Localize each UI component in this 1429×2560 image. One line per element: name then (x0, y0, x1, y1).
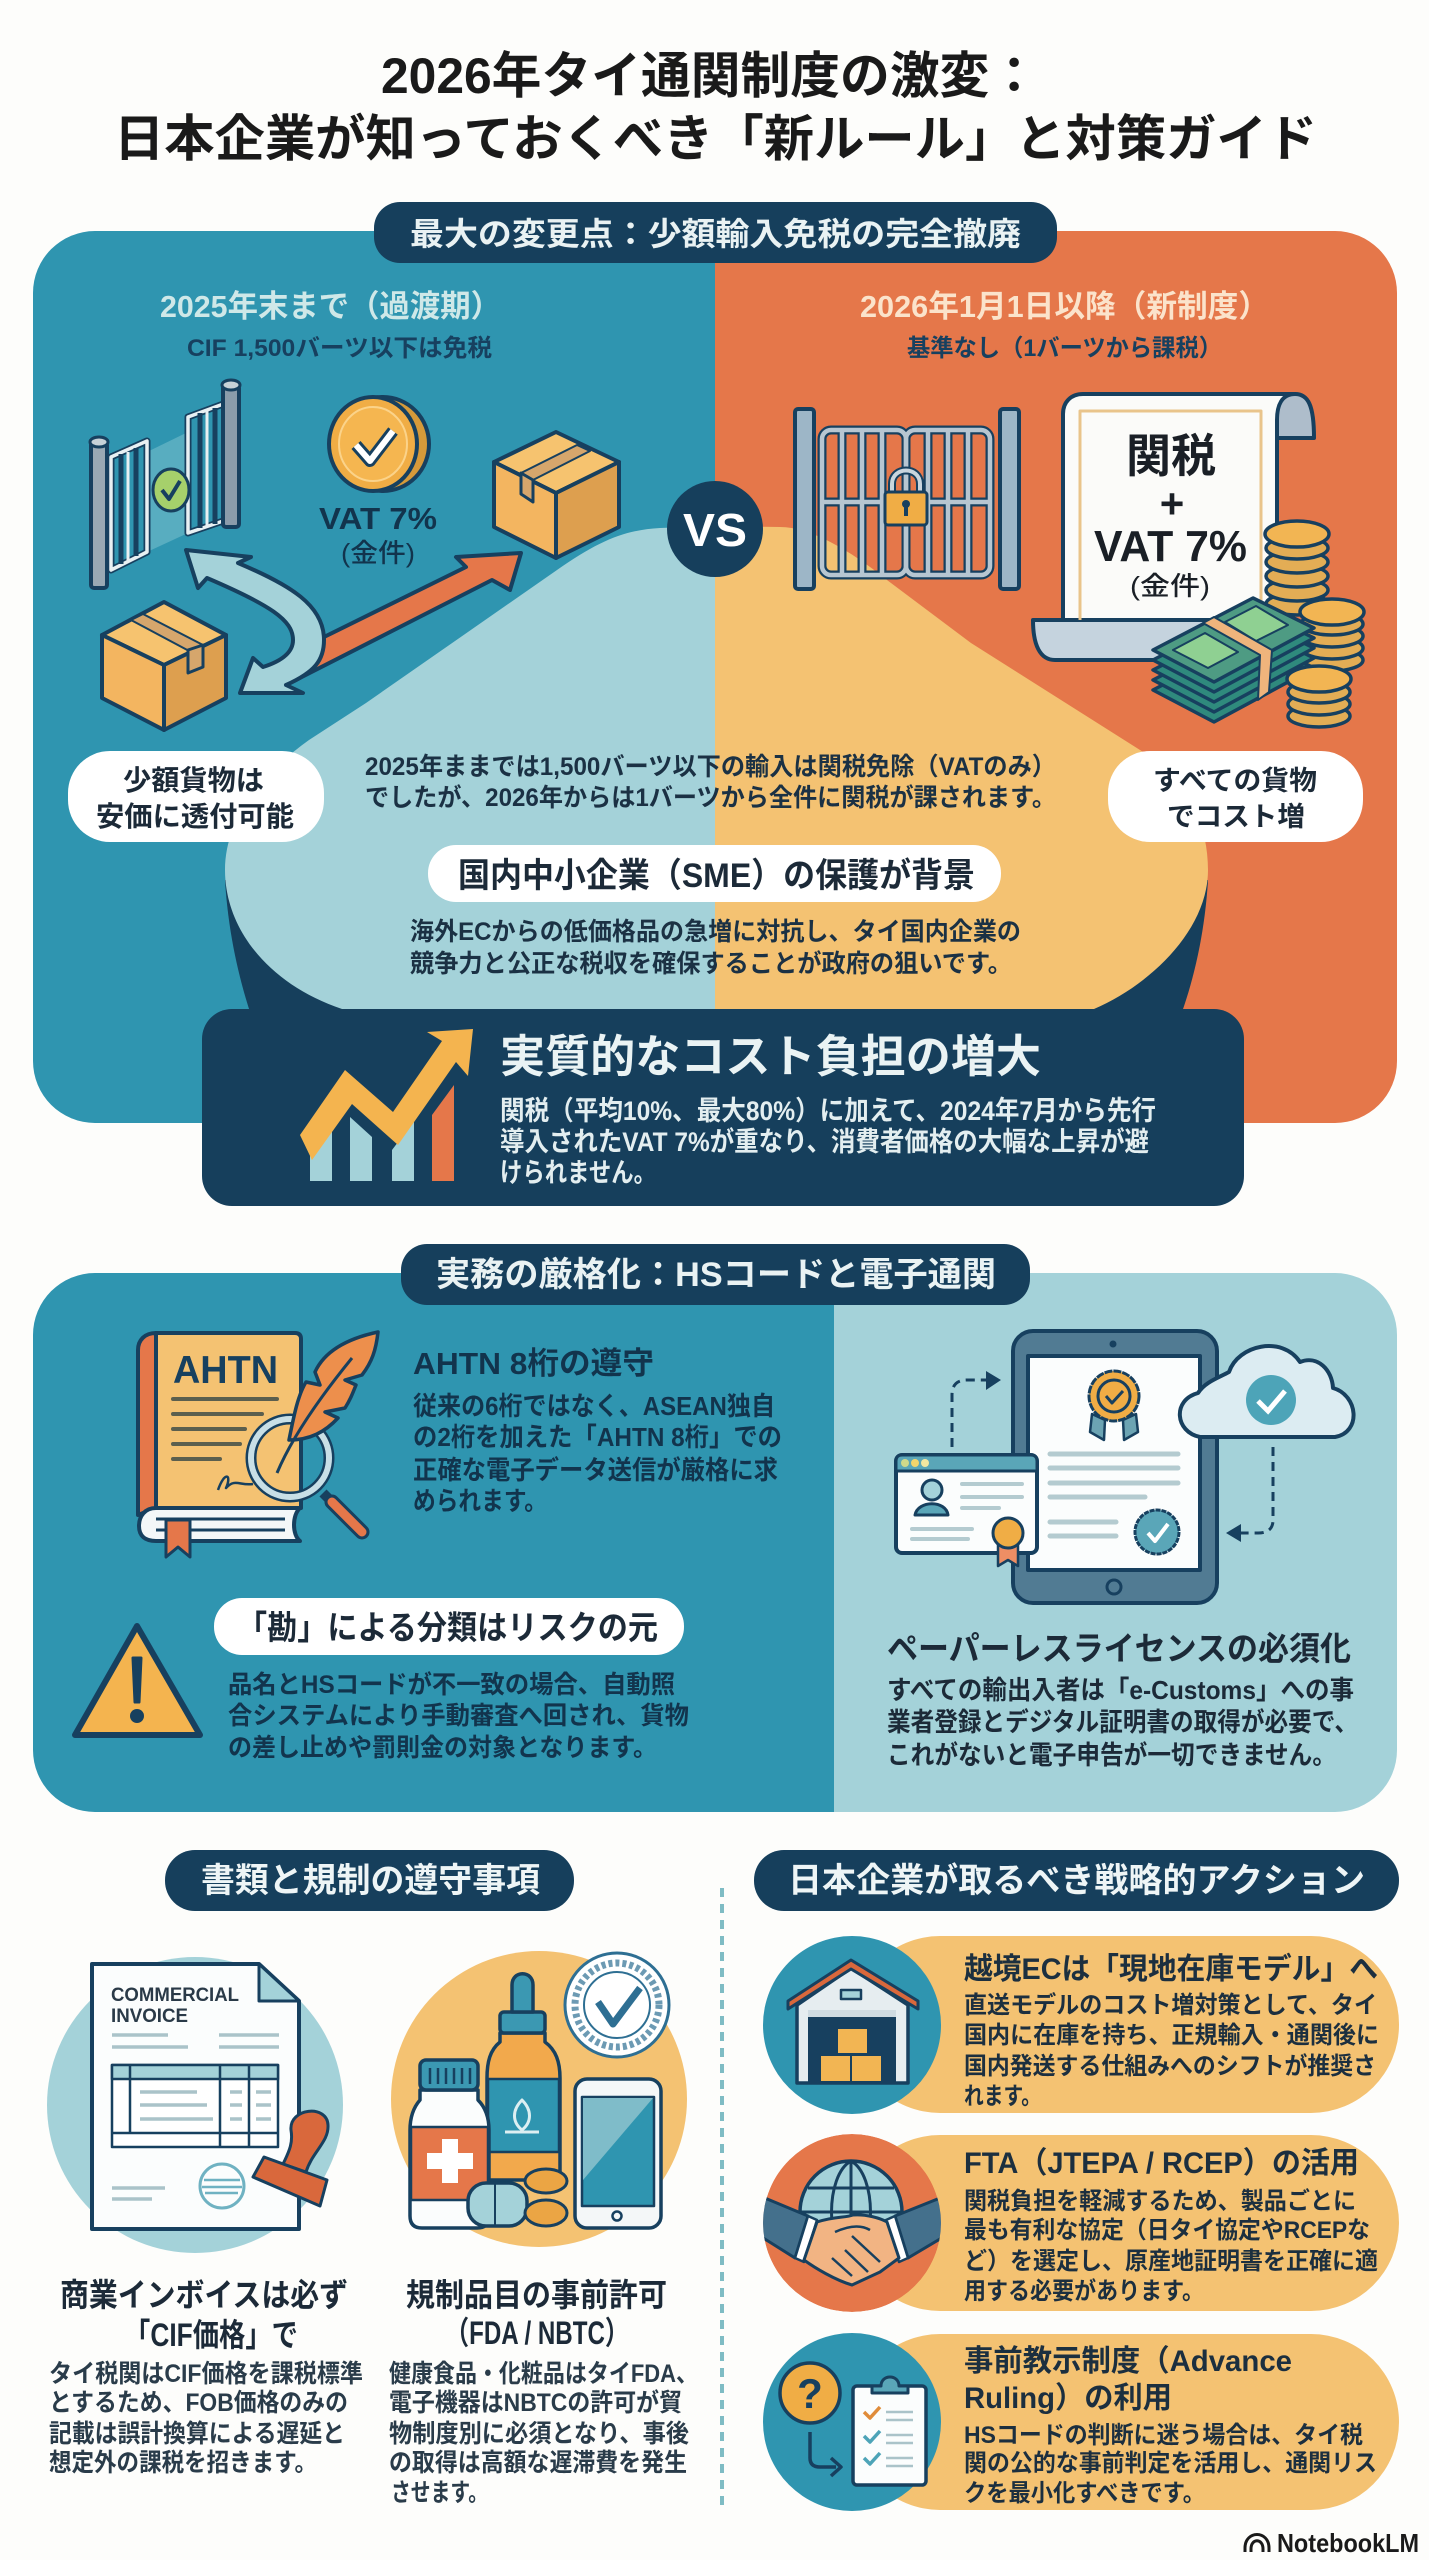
card: local inventory model: 国内発送する仕組みへのシフトが推奨さ (964, 2052, 1376, 2080)
callout: small parcels left bubble: 少額貨物は (123, 765, 264, 796)
icon: locked gate (795, 409, 1019, 589)
callout: all parcels right bubble: でコスト増 (1167, 802, 1305, 832)
icon: box left (102, 602, 226, 730)
card: local inventory model: 国内に在庫を持ち、正規輸入・通関後に (964, 2022, 1379, 2049)
card: advance ruling (763, 2333, 1399, 2511)
text block: SME explanation (410, 918, 1021, 978)
icon: warning triangle (75, 1626, 200, 1735)
callout: SME protection pill: 国内中小企業（SME）の保護が背景 (458, 856, 975, 895)
title (114, 48, 1317, 167)
left column heading (160, 289, 501, 362)
icon: warehouse (763, 1936, 941, 2114)
text: paperless license (887, 1630, 1358, 1770)
card: FTA usage (760, 2134, 1399, 2312)
section pill: documents (165, 1850, 574, 1911)
text: risk body: 品名とHSコードが不一致の場合、自動照 (228, 1670, 675, 1699)
icon: open gate (90, 380, 240, 588)
panel: cost burden: 実質的なコスト負担の増大 (500, 1031, 1041, 1082)
text: paperless license: 業者登録とデジタル証明書の取得が必要で、 (887, 1707, 1358, 1737)
VAT label left (319, 501, 437, 568)
card: local inventory model: 直送モデルのコスト増対策として、タイ (964, 1991, 1377, 2019)
card: local inventory model: 越境ECは「現地在庫モデル」へ (964, 1952, 1378, 1986)
icon: commercial invoice: INVOICE (111, 2006, 188, 2027)
arrow: orange export arrow (286, 553, 521, 685)
text: AHTN heading and body: 正確な電子データ送信が厳格に求 (413, 1455, 778, 1485)
text: risk body: 合システムにより手動審査へ回され、貨物 (228, 1702, 689, 1730)
text: AHTN heading and body: められます。 (413, 1486, 547, 1516)
card: FTA usage: 用する必要があります。 (964, 2277, 1204, 2305)
icon: commercial invoice: COMMERCIAL (111, 1985, 239, 2006)
card: FTA usage: 関税負担を軽減するため、製品ごとに (964, 2187, 1356, 2215)
text: risk body (228, 1670, 689, 1762)
card: advance ruling: クを最小化すべきです。 (964, 2480, 1205, 2507)
text: AHTN heading and body: の2桁を加えた「AHTN 8桁」での (413, 1422, 782, 1452)
icon: AHTN book (138, 1332, 378, 1557)
title: 2026年タイ通関制度の激変： (381, 48, 1039, 104)
icon: tablet with certificate (1013, 1331, 1217, 1603)
right column heading: 基準なし（1バーツから課税） (907, 335, 1222, 362)
callout: SME protection pill (428, 845, 1001, 902)
card: advance ruling: Ruling）の利用 (964, 2382, 1172, 2415)
text: prior permit rule: の取得は高額な遅滞費を発生 (389, 2449, 687, 2477)
left column heading: CIF 1,500バーツ以下は免税 (187, 335, 492, 362)
text: AHTN heading and body: 従来の6桁ではなく、ASEAN独自 (413, 1391, 775, 1421)
text block: rule change summary (365, 753, 1056, 812)
text: prior permit rule: （FDA / NBTC） (445, 2315, 629, 2351)
text: AHTN heading and body: AHTN 8桁の遵守 (413, 1346, 654, 1381)
card: FTA usage: 最も有利な協定（日タイ協定やRCEPな (964, 2217, 1370, 2244)
icon: handshake and globe (760, 2134, 945, 2312)
icon: tax scroll document: + (1160, 480, 1184, 527)
text: commercial invoice rule: 「CIF価格」で (124, 2317, 298, 2353)
icon: question and checklist: ? (797, 2370, 823, 2417)
bar chart icon (300, 1029, 473, 1181)
section pill: HS code: 実務の厳格化：HSコードと電子通関 (436, 1256, 996, 1294)
icon: box right (494, 432, 619, 558)
text: commercial invoice rule: タイ税関はCIF価格を課税標準 (49, 2360, 363, 2388)
icon: commercial invoice (47, 1957, 343, 2253)
section pill: HS code (401, 1244, 1030, 1305)
text: paperless license: すべての輸出入者は「e-Customs」への事 (887, 1675, 1354, 1705)
text: prior permit rule: 電子機器はNBTCの許可が貿 (389, 2388, 682, 2417)
panel: cost burden (202, 1009, 1244, 1206)
text: prior permit rule: 物制度別に必須となり、事後 (389, 2420, 689, 2448)
card: local inventory model: れます。 (964, 2083, 1041, 2110)
callout: guesswork risk pill: 「勘」による分類はリスクの元 (237, 1609, 658, 1646)
text: commercial invoice rule: 想定外の課税を招きます。 (49, 2449, 317, 2477)
icon: coins and banknotes (1153, 521, 1364, 727)
arrow: pale return arrow (186, 550, 324, 693)
card: advance ruling: 関の公的な事前判定を活用し、通関リス (964, 2450, 1377, 2477)
card: advance ruling: 事前教示制度（Advance (964, 2345, 1292, 2378)
section pill: strategic actions (754, 1850, 1399, 1911)
panel: cost burden: けられません。 (500, 1158, 656, 1188)
text block: rule change summary: 2025年ままでは1,500バーツ以下の輸入は関税免除（VATのみ） (365, 753, 1056, 781)
card: FTA usage: ど）を選定し、原産地証明書を正確に適 (964, 2248, 1378, 2275)
callout: small parcels left bubble (68, 751, 324, 842)
section pill: biggest change (374, 202, 1057, 263)
panel: HS code and e-customs (33, 1273, 1397, 1812)
text block: rule change summary: でしたが、2026年からは1バーツから全件に関税が課されます。 (365, 783, 1056, 812)
icon: profile window (896, 1455, 1037, 1566)
section pill: strategic actions: 日本企業が取るべき戦略的アクション (788, 1861, 1365, 1900)
icon: coin (329, 397, 429, 491)
panel: cost burden: 関税（平均10%、最大80%）に加えて、2024年7月から先行 (500, 1096, 1156, 1126)
text: commercial invoice rule: 商業インボイスは必ず (60, 2277, 348, 2313)
VAT label left: (金件) (341, 538, 415, 568)
icon: tax scroll document (1033, 394, 1314, 660)
text: AHTN heading and body (413, 1346, 782, 1516)
VAT label left: VAT 7% (319, 501, 437, 536)
text block: SME explanation: 海外ECからの低価格品の急増に対抗し、タイ国内企業の (410, 918, 1021, 946)
icon: question and checklist (763, 2333, 941, 2511)
text: paperless license: これがないと電子申告が一切できません。 (887, 1740, 1336, 1770)
text: risk body: の差し止めや罰則金の対象となります。 (228, 1734, 657, 1762)
icon: regulated products (391, 1951, 687, 2247)
callout: small parcels left bubble: 安価に透付可能 (96, 801, 294, 832)
card: advance ruling: HSコードの判断に迷う場合は、タイ税 (964, 2422, 1363, 2449)
callout: guesswork risk pill (214, 1598, 684, 1655)
section pill: documents: 書類と規制の遵守事項 (201, 1862, 540, 1900)
icon: VS badge: VS (683, 504, 747, 556)
title: 日本企業が知っておくべき「新ルール」と対策ガイド (114, 111, 1317, 167)
icon: AHTN book: AHTN (173, 1349, 278, 1392)
left column heading: 2025年末まで（過渡期） (160, 289, 501, 324)
icon: cloud with check (1180, 1346, 1354, 1437)
icon: tax scroll document: (金件) (1130, 571, 1210, 601)
icon: VS badge (667, 481, 763, 577)
text: prior permit rule: 健康食品・化粧品はタイFDA、 (389, 2360, 698, 2388)
callout: all parcels right bubble: すべての貨物 (1153, 766, 1317, 796)
panel: cost burden: 導入されたVAT 7%が重なり、消費者価格の大幅な上昇が避 (500, 1126, 1149, 1157)
text: commercial invoice rule (49, 2277, 363, 2477)
text: prior permit rule (389, 2277, 698, 2507)
text: paperless license: ペーパーレスライセンスの必須化 (887, 1630, 1351, 1667)
card: FTA usage: FTA（JTEPA / RCEP）の活用 (964, 2147, 1359, 2180)
text block: SME explanation: 競争力と公正な税収を確保することが政府の狙いです。 (410, 949, 1012, 978)
text: commercial invoice rule: とするため、FOB価格のみの (49, 2389, 348, 2417)
right column heading: 2026年1月1日以降（新制度） (860, 289, 1269, 324)
card: local inventory model (763, 1936, 1399, 2114)
section pill: biggest change: 最大の変更点：少額輸入免税の完全撤廃 (410, 216, 1021, 252)
text: prior permit rule: 規制品目の事前許可 (406, 2277, 667, 2313)
icon: dashed arrows (952, 1371, 1273, 1542)
callout: all parcels right bubble (1108, 751, 1363, 842)
icon: tax scroll document: VAT 7% (1094, 522, 1247, 571)
text: commercial invoice rule: 記載は誤計換算による遅延と (49, 2420, 345, 2448)
text: prior permit rule: させます。 (391, 2479, 488, 2507)
right column heading (860, 289, 1269, 362)
icon: tax scroll document: 関税 (1126, 430, 1216, 482)
